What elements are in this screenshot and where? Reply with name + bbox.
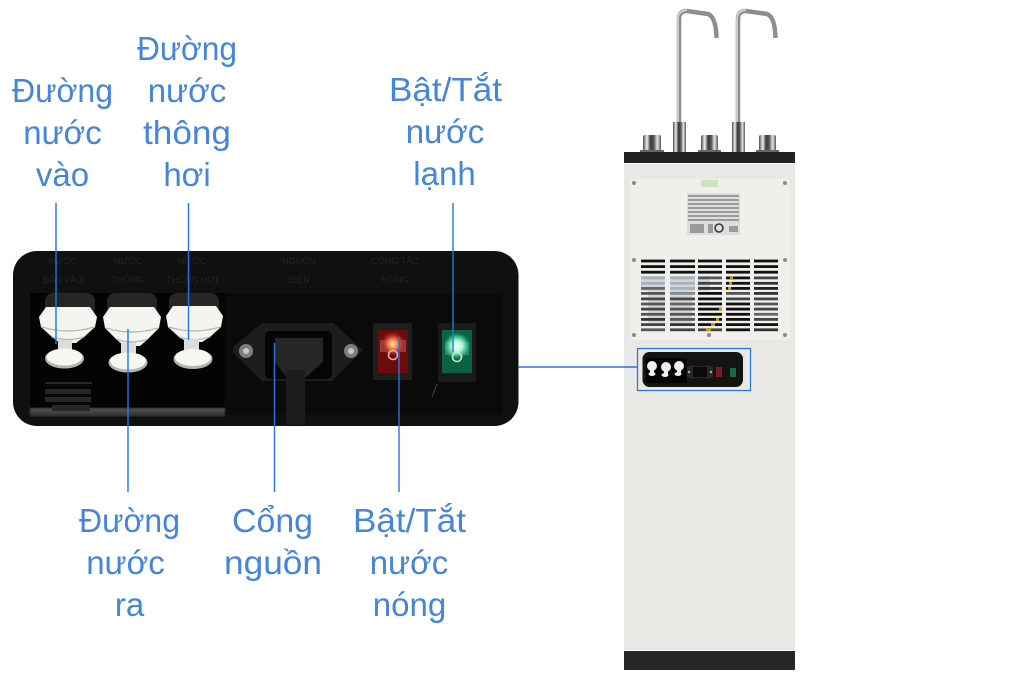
- callout: hot water switch: [353, 337, 466, 623]
- icon: right faucet: [732, 10, 776, 152]
- callout: power port: nguồn: [224, 544, 322, 581]
- green logo sticker: [701, 180, 718, 187]
- callout: water inlet: nước: [23, 114, 102, 151]
- highlight box: [638, 348, 750, 390]
- callout: cold water switch: lạnh: [413, 155, 476, 192]
- small connector panel: [642, 352, 743, 387]
- embossed panel labels: THÔNG: [112, 275, 144, 285]
- callout: water outlet: Đường: [79, 502, 180, 539]
- embossed panel labels: NƯỚC: [178, 256, 207, 266]
- callout: water inlet: [12, 72, 113, 344]
- bottom black base: [624, 651, 795, 670]
- callout: vent line: [137, 30, 237, 340]
- embossed panel labels: [43, 255, 419, 285]
- icon: green cold water switch: [432, 323, 476, 397]
- callout: power port: Cổng: [232, 502, 313, 539]
- top black bar: [624, 152, 795, 163]
- icon: red hot water switch: [373, 323, 412, 380]
- icon: water outlet fitting: [103, 293, 161, 372]
- icon: power socket with cable: [233, 323, 363, 425]
- callout: cold water switch: [389, 71, 502, 352]
- embossed panel labels: NƯỚC: [49, 256, 78, 266]
- callout: vent line: hơi: [163, 156, 211, 193]
- embossed panel labels: CÔNG TẮC: [371, 256, 419, 266]
- callout: water outlet: nước: [86, 544, 165, 581]
- embossed panel labels: THÔNG HƠI: [166, 275, 218, 285]
- callout: water outlet: ra: [115, 586, 145, 623]
- callout: hot water switch: nóng: [373, 586, 446, 623]
- embossed panel labels: ĐIỆN: [288, 275, 310, 285]
- ventilation grille: [641, 260, 778, 331]
- panel: enlarged connector panel: [13, 251, 518, 426]
- icon: water inlet fitting: [39, 293, 97, 368]
- plate screws: [632, 181, 787, 337]
- callout: vent line: nước: [148, 72, 226, 109]
- yellow wires behind grille: [706, 276, 733, 331]
- callout: hot water switch: nước: [370, 544, 448, 581]
- callout: power port: [224, 343, 322, 581]
- callout: vent line: Đường: [137, 30, 237, 67]
- embossed panel labels: NƯỚC: [114, 256, 143, 266]
- callout: water outlet: [79, 329, 180, 623]
- callout: water inlet: Đường: [12, 72, 113, 109]
- embossed panel labels: NGUỒN: [282, 255, 316, 266]
- embossed panel labels: ĐẦU VÀO: [43, 275, 83, 285]
- warning sticker: [45, 382, 92, 411]
- callout: cold water switch: nước: [406, 113, 484, 150]
- machine body: [624, 164, 795, 650]
- callout: water inlet: vào: [36, 156, 89, 193]
- back plate: [630, 179, 790, 340]
- icon: top valves: [640, 135, 779, 152]
- callout: cold water switch: Bật/Tắt: [389, 71, 502, 108]
- spec label: [687, 193, 740, 235]
- water purifier machine, rear view: [624, 10, 795, 670]
- icon: vent fitting: [166, 293, 223, 369]
- callout: hot water switch: Bật/Tắt: [353, 502, 466, 539]
- connector line to highlight box: [518, 366, 637, 368]
- embossed panel labels: NÓNG: [382, 275, 408, 285]
- callout: vent line: thông: [143, 114, 231, 151]
- icon: left faucet: [673, 10, 716, 152]
